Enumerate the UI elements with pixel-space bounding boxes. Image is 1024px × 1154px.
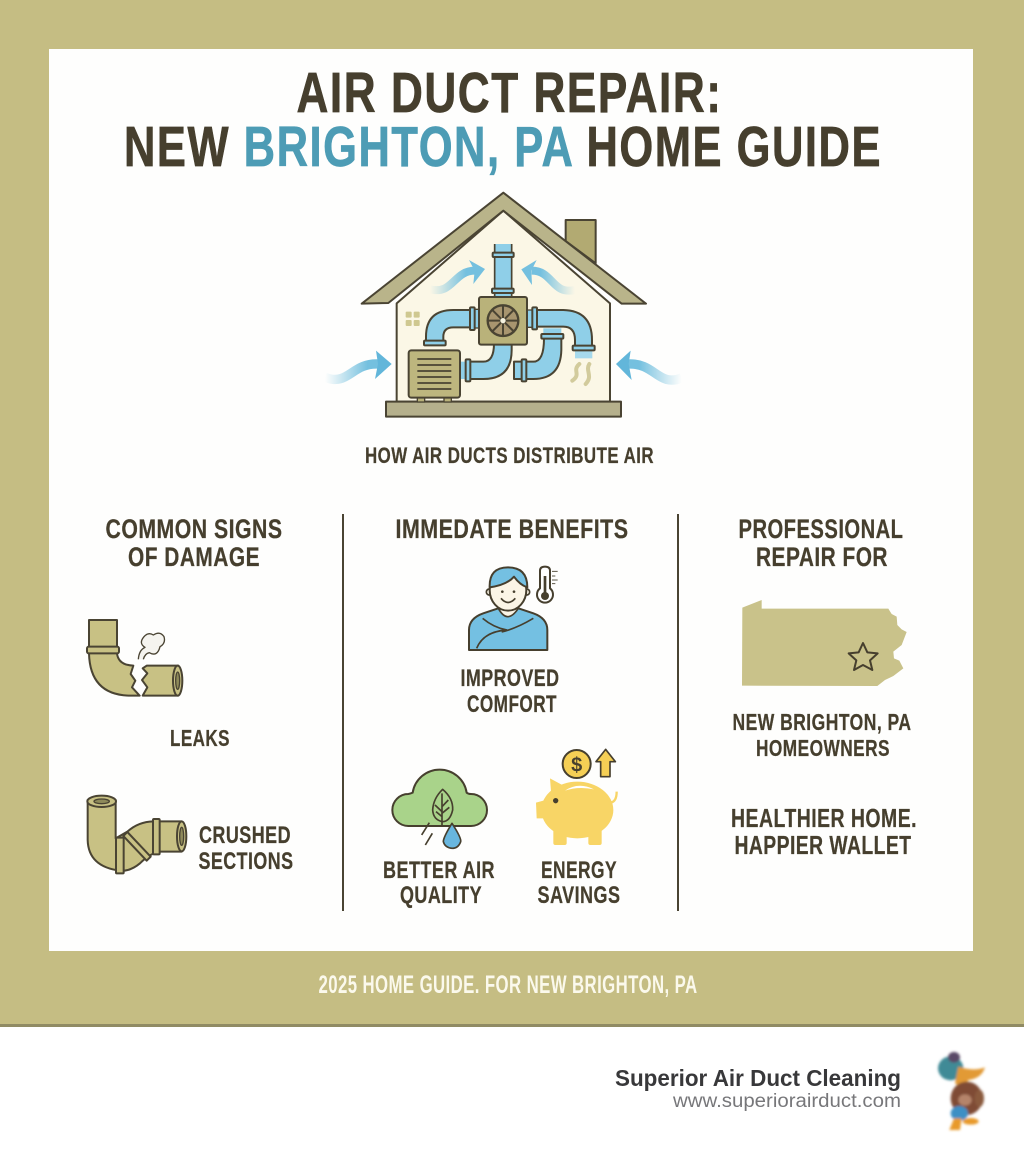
title (124, 61, 882, 179)
panel: professional repair (731, 514, 917, 860)
title: NEW BRIGHTON, PA HOME GUIDE (124, 115, 882, 179)
right upper duct (527, 307, 595, 358)
label: improved comfort: COMFORT (467, 691, 557, 718)
heading: professional repair for (738, 514, 904, 572)
label: better air quality (383, 857, 495, 909)
vertical top duct (492, 244, 514, 297)
icon: comfortable person with thermometer (469, 567, 558, 650)
brand url: www.superiorairduct.com (672, 1091, 901, 1112)
footer divider (0, 1024, 1024, 1027)
label: new brighton homeowners (732, 709, 912, 761)
label: improved comfort (460, 665, 560, 718)
heading: common signs: OF DAMAGE (128, 542, 260, 572)
icon: cloud with leaf and drop (392, 770, 487, 848)
heading: professional repair for: REPAIR FOR (756, 542, 888, 572)
heading: common signs: COMMON SIGNS (106, 514, 282, 544)
lower centre duct (461, 343, 512, 381)
label: new brighton homeowners: HOMEOWNERS (756, 735, 890, 761)
roof (362, 193, 646, 304)
label: leaks: LEAKS (170, 725, 230, 751)
illustration: house with air ducts (325, 193, 682, 417)
heading: common signs (106, 514, 282, 572)
icon: leaking pipe (87, 620, 182, 696)
window dots (406, 312, 420, 326)
panel: common signs of damage (87, 514, 294, 875)
heading: professional repair for: PROFESSIONAL (738, 514, 904, 544)
label: energy savings: ENERGY (541, 857, 617, 884)
lower right duct (514, 328, 563, 381)
label: better air quality: BETTER AIR (383, 857, 495, 884)
air flow arrows (325, 260, 682, 380)
main white panel (49, 49, 973, 951)
panel: immediate benefits (383, 514, 628, 909)
heat wisps (572, 364, 589, 384)
label: improved comfort: IMPROVED (460, 665, 560, 692)
icon: Pennsylvania map with star (742, 600, 907, 686)
label: new brighton homeowners: NEW BRIGHTON, PA (732, 709, 912, 735)
icon: piggy bank with coin and arrow (536, 749, 617, 845)
illustration caption: HOW AIR DUCTS DISTRIBUTE AIR (365, 443, 654, 468)
fan unit (479, 297, 527, 345)
callout: healthier home happier wallet: HEALTHIER HOME. (731, 803, 917, 833)
icon: piggy bank with coin and arrow: $ (571, 754, 582, 776)
callout: healthier home happier wallet: HAPPIER WALLET (734, 830, 912, 860)
callout: healthier home happier wallet (731, 803, 917, 860)
brand block (615, 1065, 901, 1112)
label: energy savings (538, 857, 620, 909)
label: crushed sections: SECTIONS (198, 848, 294, 875)
label: energy savings: SAVINGS (538, 882, 620, 909)
column dividers (343, 514, 678, 911)
icon: crushed pipe (87, 796, 186, 873)
foundation (386, 402, 621, 417)
label: crushed sections: CRUSHED (199, 822, 291, 849)
icon: mascot (938, 1052, 985, 1130)
brand name: Superior Air Duct Cleaning (615, 1065, 901, 1091)
furnace unit (409, 350, 460, 402)
chimney (566, 220, 596, 263)
banner text: 2025 HOME GUIDE. FOR NEW BRIGHTON, PA (318, 971, 698, 999)
heading: immediate benefits: IMMEDATE BENEFITS (396, 514, 628, 544)
left upper duct (424, 307, 479, 345)
label: crushed sections (198, 822, 294, 875)
house body (397, 211, 610, 402)
label: better air quality: QUALITY (400, 882, 482, 909)
title: AIR DUCT REPAIR: (296, 61, 722, 125)
